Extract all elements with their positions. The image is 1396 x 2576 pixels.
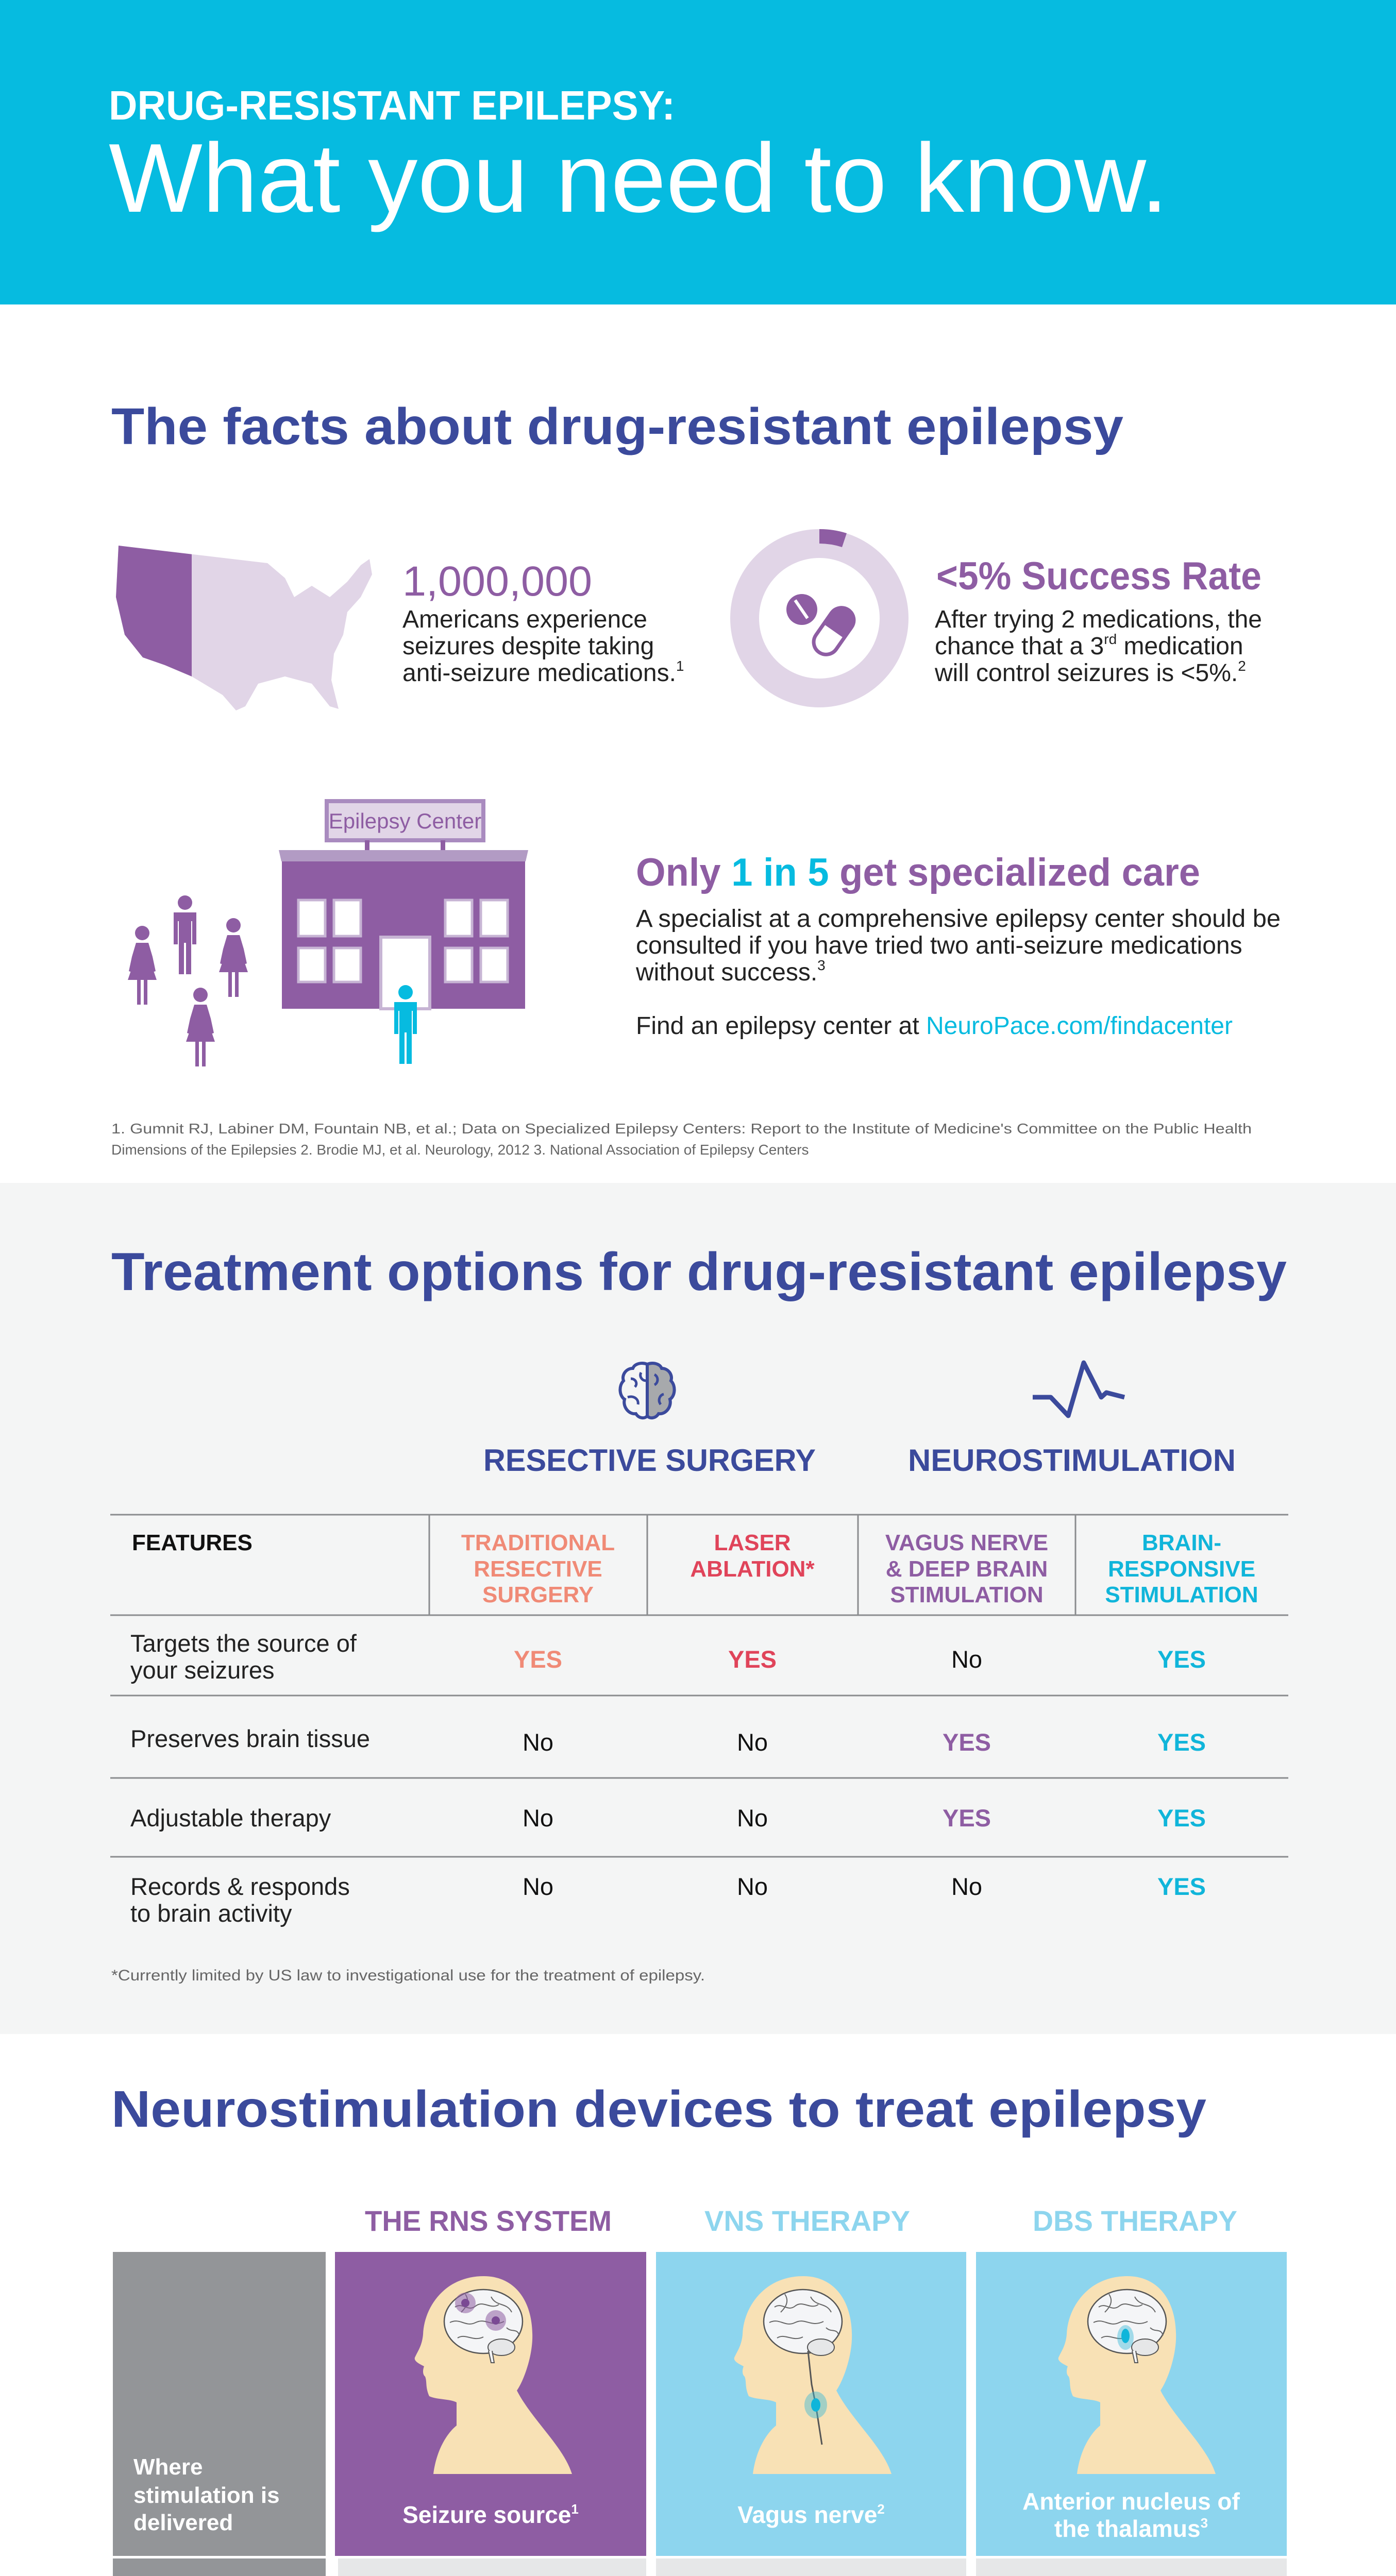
row 1 captions: Vagus nerve (737, 2501, 877, 2528)
table values: YES (1157, 1646, 1206, 1673)
header kicker: DRUG-RESISTANT EPILEPSY: (109, 82, 675, 128)
footnotes: facts section: Dimensions of the Epilepsies 2. Brodie MJ, et al. Neurology, 2012 3. National Association of Epilepsy Centers (111, 1142, 809, 1158)
icon: pulse wave (1033, 1363, 1124, 1416)
table header row: LASER (714, 1530, 791, 1555)
header title: What you need to know. (109, 124, 1168, 233)
table header row: ABLATION* (690, 1556, 815, 1582)
table row labels: Targets the source of (130, 1630, 357, 1657)
text block: specialized care: A specialist at a comprehensive epilepsy center should be (636, 905, 1281, 933)
row 1 captions: Anterior nucleus of (1022, 2488, 1240, 2515)
text block: specialized care: Only 1 in 5 get specialized care (636, 851, 1200, 894)
header banner (0, 0, 1396, 304)
table values: YES (728, 1646, 777, 1673)
table values: YES (943, 1728, 991, 1756)
person: cyan (394, 985, 417, 1064)
illustration: epilepsy center building and people: Epilepsy Center (329, 809, 481, 833)
text block: specialized care: Find an epilepsy center at NeuroPace.com/findacenter (636, 1012, 1233, 1040)
table row labels: Adjustable therapy (130, 1804, 331, 1832)
table: treatment comparison (110, 1515, 1288, 1927)
stat: success rate (934, 554, 1262, 687)
row labels (133, 2454, 280, 2576)
footnotes: facts section: 1. Gumnit RJ, Labiner DM, Fountain NB, et al.; Data on Specialized Epilepsy Centers: Report to the Institute of Medicine's Committee on the Public Health (111, 1121, 1252, 1137)
footnotes: facts section (111, 1121, 1252, 1158)
row labels: stimulation is (133, 2483, 280, 2508)
table header row: RESPONSIVE (1108, 1556, 1255, 1582)
stat: 1,000,000: 1,000,000 (402, 558, 592, 605)
person: female 2 (219, 918, 248, 997)
illustration: epilepsy center building and people (128, 801, 528, 1066)
illustration: head RNS (415, 2276, 572, 2474)
text block: specialized care: consulted if you have tried two anti-seizure medications (636, 932, 1242, 959)
stat: success rate: will control seizures is <5%. (935, 659, 1238, 687)
heading: resective surgery: RESECTIVE SURGERY (483, 1443, 816, 1478)
table values: No (737, 1728, 768, 1756)
illustration: head DBS (1058, 2276, 1216, 2474)
table row labels: Records & responds (130, 1873, 350, 1900)
stat: 1,000,000: Americans experience (402, 606, 647, 633)
table header row: SURGERY (482, 1582, 594, 1607)
table row labels: to brain activity (130, 1900, 292, 1927)
column headers: devices: THE RNS SYSTEM (365, 2205, 612, 2237)
section heading: facts: The facts about drug-resistant epilepsy (111, 398, 1123, 455)
row 1 captions: 3 (1201, 2515, 1208, 2531)
panel: treatment options (0, 1183, 1396, 2034)
stat: 1,000,000 (402, 558, 684, 687)
icon: US map (116, 546, 372, 710)
table values: No (951, 1873, 982, 1900)
stat: success rate: rd (1104, 631, 1117, 647)
stat: success rate: chance that a 3 (935, 633, 1104, 660)
row 1 captions: 1 (571, 2501, 579, 2517)
table values: YES (1157, 1728, 1206, 1756)
table: device comparison (113, 2252, 1287, 2576)
table values: YES (514, 1646, 562, 1673)
section heading: neurostimulation devices: Neurostimulation devices to treat epilepsy (111, 2080, 1206, 2138)
text block: specialized care: without success. (636, 959, 817, 986)
table values: No (951, 1646, 982, 1673)
stat: success rate: 2 (1238, 658, 1246, 674)
person: female 1 (128, 926, 157, 1005)
text block: specialized care (635, 851, 1281, 1040)
table row labels: your seizures (130, 1656, 274, 1684)
table header row: FEATURES (132, 1530, 253, 1555)
table values: No (737, 1804, 768, 1832)
icon: pills (786, 594, 859, 659)
cells (335, 2252, 646, 2556)
row 1 captions: Seizure source (402, 2501, 571, 2528)
table values (514, 1646, 1206, 1900)
stat: success rate: After trying 2 medications, the (935, 606, 1262, 633)
door (381, 937, 430, 1009)
icon: brain (620, 1363, 675, 1418)
table values: YES (1157, 1804, 1206, 1832)
column headers: devices: DBS THERAPY (1033, 2205, 1237, 2237)
row 1 captions: 2 (877, 2501, 885, 2517)
table header row: RESECTIVE (474, 1556, 602, 1582)
stat: 1,000,000: seizures despite taking (402, 633, 654, 660)
heading: neurostimulation: NEUROSTIMULATION (908, 1443, 1236, 1478)
column headers: devices: VNS THERAPY (704, 2205, 910, 2237)
footnote: laser ablation: *Currently limited by US law to investigational use for the treatment of epilepsy. (111, 1967, 705, 1984)
stat: success rate: <5% Success Rate (936, 554, 1262, 598)
stat: success rate: medication (1117, 633, 1243, 660)
table values: No (523, 1804, 553, 1832)
row 1 captions (402, 2488, 1240, 2542)
table values: No (523, 1873, 553, 1900)
windows (298, 900, 325, 936)
row labels: Where (133, 2454, 203, 2480)
row 1 captions: the thalamus (1054, 2515, 1201, 2542)
table header row: STIMULATION (1105, 1582, 1258, 1607)
table values: YES (1157, 1873, 1206, 1900)
row labels: delivered (133, 2510, 233, 2535)
person: female 3 (186, 988, 215, 1066)
table values: YES (943, 1804, 991, 1832)
table header row: VAGUS NERVE (885, 1530, 1048, 1555)
table values: No (523, 1728, 553, 1756)
sign (327, 801, 483, 840)
stat: 1,000,000: anti-seizure medications. (402, 659, 676, 687)
table header row: STIMULATION (890, 1582, 1044, 1607)
chart: donut success rate (745, 529, 894, 693)
table row labels: Preserves brain tissue (130, 1725, 370, 1752)
table row labels (130, 1630, 370, 1927)
label column (113, 2252, 326, 2576)
column headers: devices (365, 2205, 1237, 2237)
roof (279, 850, 528, 861)
illustration: head VNS (734, 2276, 892, 2474)
table header row: & DEEP BRAIN (886, 1556, 1048, 1582)
table values: No (737, 1873, 768, 1900)
table header row: BRAIN- (1142, 1530, 1221, 1555)
table header row: TRADITIONAL (461, 1530, 615, 1555)
section heading: treatment options: Treatment options for drug-resistant epilepsy (111, 1242, 1287, 1302)
text block: specialized care: 3 (817, 957, 826, 973)
person: male purple (174, 895, 196, 974)
stat: 1,000,000: 1 (676, 658, 684, 674)
table header row (132, 1530, 1258, 1607)
